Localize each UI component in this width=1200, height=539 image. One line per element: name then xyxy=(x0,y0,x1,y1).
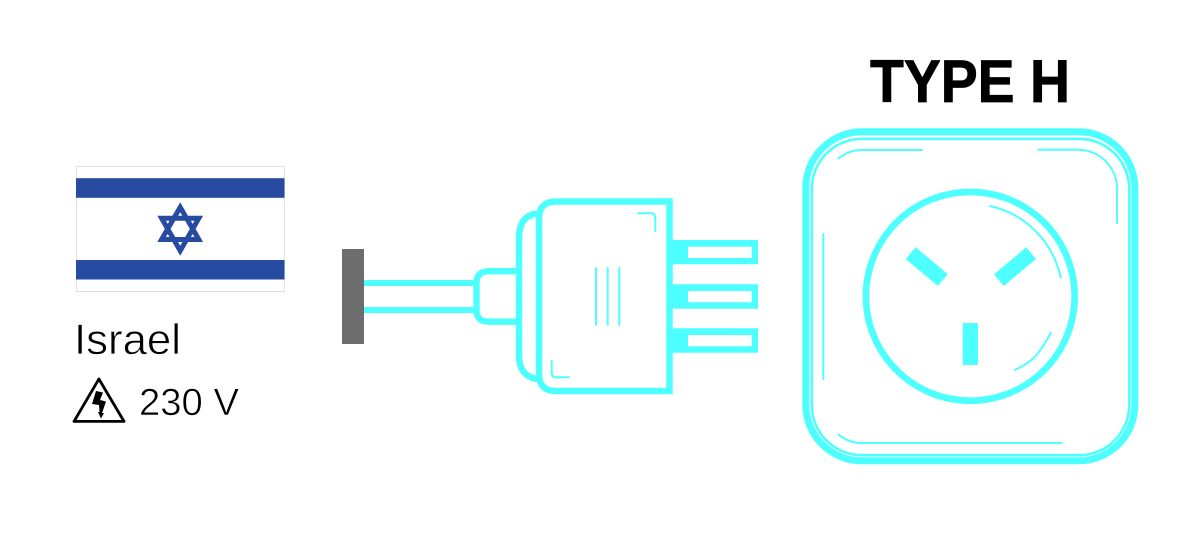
icon: voltage warning triangle xyxy=(74,379,124,421)
cable xyxy=(364,280,475,313)
cable end xyxy=(342,249,364,344)
pins xyxy=(669,240,758,353)
body details xyxy=(552,213,655,377)
frame highlights xyxy=(823,150,1117,443)
plug illustration xyxy=(342,202,758,391)
plug rear shell xyxy=(519,214,538,379)
plug collar xyxy=(476,271,518,322)
socket frame xyxy=(806,132,1135,461)
socket inner frame xyxy=(812,139,1129,455)
face highlights xyxy=(990,206,1061,370)
socket face xyxy=(866,192,1075,401)
icon: flag of Israel xyxy=(76,166,284,292)
socket illustration xyxy=(806,132,1135,461)
socket holes xyxy=(906,247,1036,365)
voltage label: 230 V xyxy=(139,382,240,424)
country name: Israel xyxy=(74,316,181,364)
plug body xyxy=(539,202,670,391)
title: TYPE H xyxy=(870,48,1070,115)
